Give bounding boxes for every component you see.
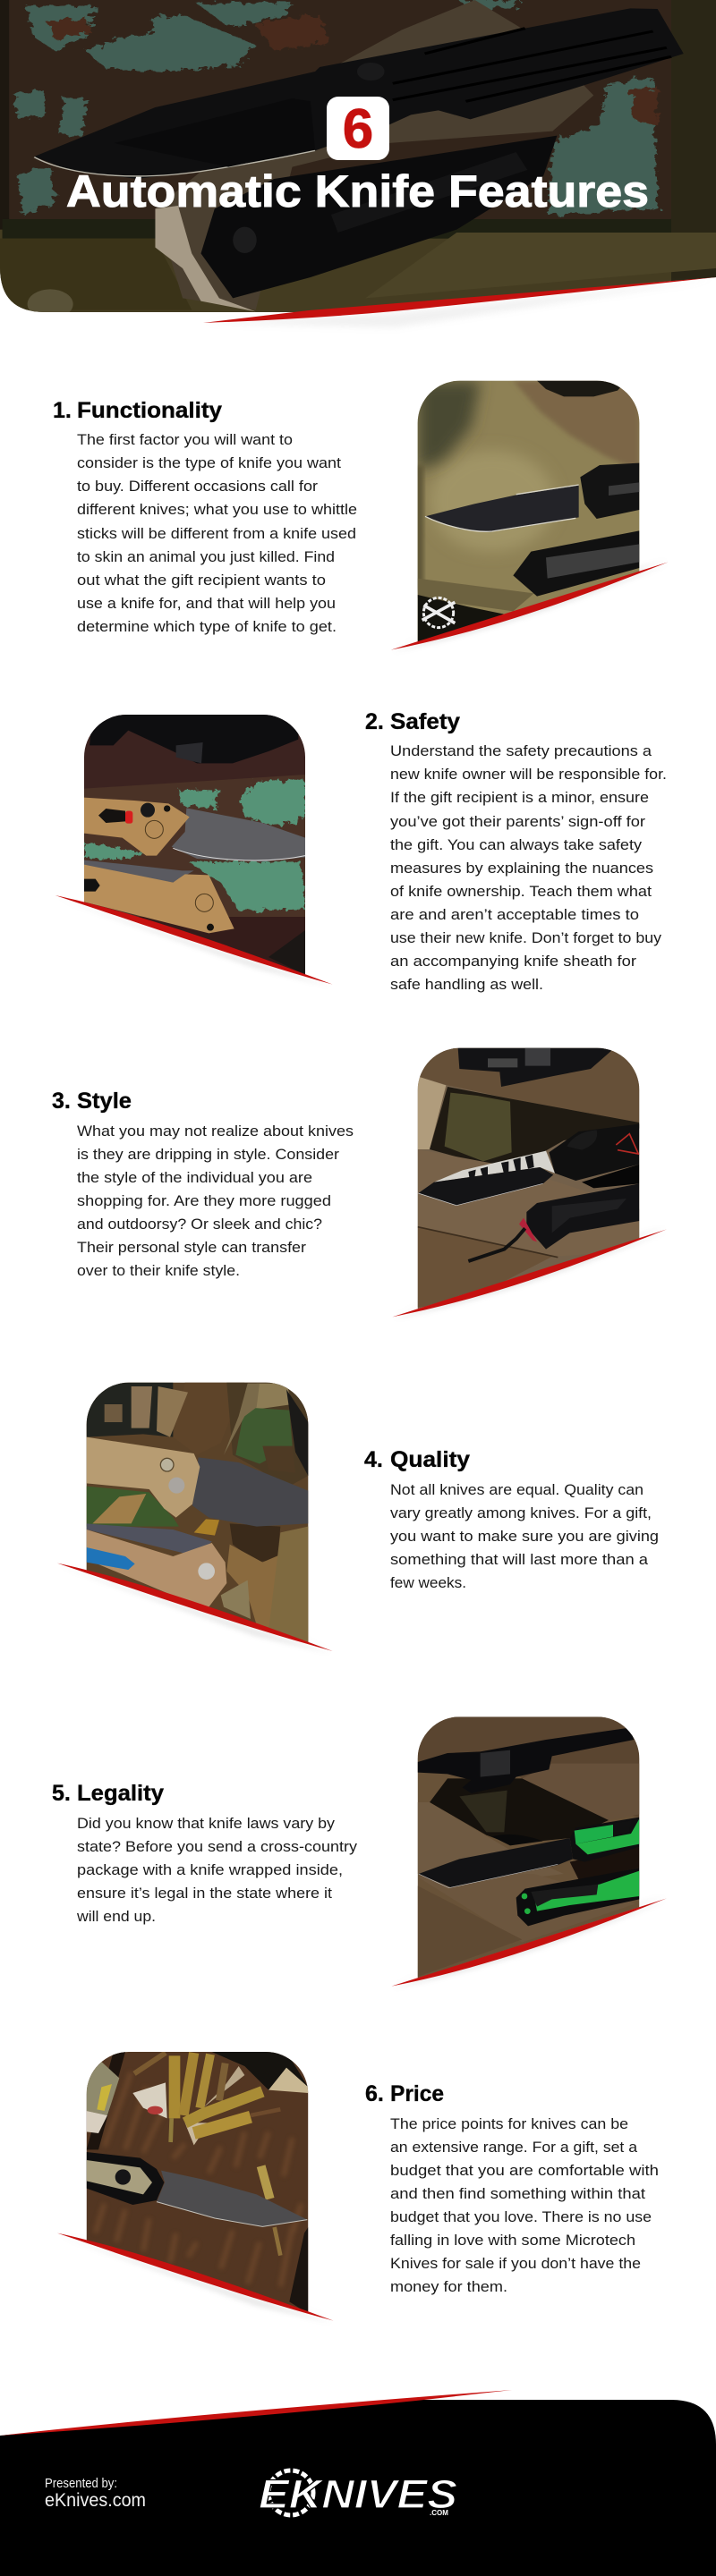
presented by text: Presented by: xyxy=(45,2477,117,2491)
body text: Their personal style can transfer xyxy=(77,1239,306,1256)
body text: ensure it’s legal in the state where it xyxy=(77,1885,332,1902)
heading xyxy=(52,1089,132,1114)
body text: is they are dripping in style. Consider xyxy=(77,1146,339,1163)
body text: over to their knife style. xyxy=(77,1262,240,1279)
image with slash xyxy=(56,1380,333,1654)
panel: 1 Functionality xyxy=(53,378,669,652)
body text: use their new knife. Don’t forget to buy xyxy=(390,929,662,946)
photo: knife and cartridges on dark wood xyxy=(83,2050,311,2318)
number badge: 6 xyxy=(343,98,373,160)
icon: logo stamp xyxy=(422,597,455,628)
title: Automatic Knife Features xyxy=(66,166,649,216)
body text: The price points for knives can be xyxy=(390,2115,628,2132)
body text: to skin an animal you just killed. Find xyxy=(77,548,335,565)
body text: use a knife for, and that will help you xyxy=(77,595,336,612)
panel: 5 Legality xyxy=(52,1715,668,1988)
icon: serrated knife xyxy=(418,1124,639,1206)
body text: and then find something within that xyxy=(390,2185,645,2202)
body text: Understand the safety precautions a xyxy=(390,742,652,759)
image with slash xyxy=(392,1045,668,1319)
panel: 3 Style xyxy=(52,1045,668,1319)
body text: an accompanying knife sheath for xyxy=(390,953,636,970)
header banner xyxy=(0,0,716,327)
body text: the style of the individual you are xyxy=(77,1169,312,1186)
body text: budget that you are comfortable with xyxy=(390,2162,659,2179)
body text: sticks will be different from a knife used xyxy=(77,525,356,542)
heading: 3. xyxy=(52,1089,71,1114)
panel: 4 Quality xyxy=(56,1380,659,1654)
heading: Price xyxy=(390,2081,444,2106)
body text xyxy=(390,1481,659,1591)
body text xyxy=(390,742,667,993)
body text: an extensive range. For a gift, set a xyxy=(390,2139,638,2156)
icon: closed green knife xyxy=(516,1868,639,1926)
body text: If the gift recipient is a minor, ensure xyxy=(390,789,649,806)
red slash xyxy=(391,562,669,650)
icon: lower tan knife xyxy=(84,860,234,933)
body text: budget that you love. There is no use xyxy=(390,2208,652,2225)
image with slash xyxy=(391,378,669,652)
photo: damascus knives on camo xyxy=(83,1380,311,1648)
body text: vary greatly among knives. For a gift, xyxy=(390,1504,652,1521)
red slash xyxy=(57,1563,333,1651)
body text: The first factor you will want to xyxy=(77,431,293,448)
footer black panel xyxy=(0,2400,716,2576)
body text: Not all knives are equal. Quality can xyxy=(390,1481,644,1498)
footer red slash xyxy=(0,2390,512,2436)
body text: What you may not realize about knives xyxy=(77,1123,354,1140)
body text: money for them. xyxy=(390,2278,507,2295)
header photo: two black knives on patina box xyxy=(0,0,716,322)
body text: are and aren’t acceptable times to xyxy=(390,906,639,923)
body text: different knives; what you use to whittle xyxy=(77,501,357,518)
body text xyxy=(77,431,357,635)
photo: green knife and rifle on crate xyxy=(414,1715,642,1983)
body text: out what the gift recipient wants to xyxy=(77,572,326,589)
body text: new knife owner will be responsible for. xyxy=(390,766,667,783)
body text: and outdoorsy? Or sleek and chic? xyxy=(77,1216,322,1233)
body text xyxy=(77,1123,354,1279)
heading: Safety xyxy=(390,709,460,734)
body text xyxy=(390,2115,659,2295)
red slash xyxy=(392,1229,667,1317)
body text: of knife ownership. Teach them what xyxy=(390,883,652,900)
number badge xyxy=(327,97,389,160)
body text xyxy=(76,1815,358,1925)
image with slash xyxy=(56,2050,334,2323)
body text: consider is the type of knife you want xyxy=(77,454,341,471)
presented by text: eKnives.com xyxy=(45,2490,146,2511)
body text: falling in love with some Microtech xyxy=(390,2232,635,2249)
heading: 1. xyxy=(53,398,72,423)
body text: to buy. Different occasions call for xyxy=(77,478,318,495)
logo: eKnives: .COM xyxy=(430,2509,448,2517)
heading: Quality xyxy=(390,1447,470,1472)
logo: eKnives: EKNIVES xyxy=(259,2471,457,2517)
presented by text xyxy=(45,2477,146,2511)
icon: open knife xyxy=(34,8,684,179)
icon: knife with blade xyxy=(425,463,639,532)
photo: tan knives on rusty patina xyxy=(83,713,307,981)
icon: upper tan knife xyxy=(84,798,305,861)
photo: serrated knife on crate xyxy=(414,1045,642,1313)
red slash xyxy=(55,895,333,985)
icon: closed black knife xyxy=(468,1165,639,1261)
heading: 4. xyxy=(364,1447,383,1472)
body text: Did you know that knife laws vary by xyxy=(77,1815,336,1832)
photo: knife on canvas xyxy=(414,378,642,647)
icon: closed handle xyxy=(513,530,639,597)
icon: lower tan knife with blue blade xyxy=(87,1523,226,1607)
body text: shopping for. Are they more rugged xyxy=(77,1192,331,1209)
image with slash xyxy=(55,713,333,987)
heading: 2. xyxy=(365,709,384,734)
body text: safe handling as well. xyxy=(390,976,543,993)
icon: bullet casing xyxy=(194,1519,219,1536)
heading: 5. xyxy=(52,1781,71,1806)
body text: measures by explaining the nuances xyxy=(390,860,653,877)
image with slash xyxy=(391,1715,668,1988)
body text: you want to make sure you are giving xyxy=(390,1528,659,1545)
body text: the gift. You can always take safety xyxy=(390,836,643,853)
header red slash xyxy=(203,277,716,327)
icon: cartridges xyxy=(134,2053,280,2256)
icon: rifle xyxy=(418,1728,634,1793)
heading: Functionality xyxy=(77,398,222,423)
body text: something that will last more than a xyxy=(390,1551,649,1568)
heading: 6. xyxy=(365,2081,384,2106)
icon: wood block xyxy=(155,0,593,310)
icon: closed knife xyxy=(200,136,557,298)
panel: 6 Price xyxy=(56,2050,659,2323)
body text: Knives for sale if you don’t have the xyxy=(390,2255,641,2272)
icon: upper damascus knife xyxy=(87,1437,308,1527)
body text: package with a knife wrapped inside, xyxy=(77,1861,343,1878)
panel: 2 Safety xyxy=(55,709,667,993)
footer xyxy=(0,2390,716,2576)
body text: you’ve got their parents’ sign-off for xyxy=(390,813,645,830)
heading: Style xyxy=(77,1089,132,1114)
red slash xyxy=(391,1898,667,1987)
heading: Legality xyxy=(77,1781,164,1806)
icon: dark blade knife xyxy=(87,2152,307,2226)
red slash xyxy=(57,2233,334,2321)
body text: state? Before you send a cross-country xyxy=(77,1838,358,1855)
body text: few weeks. xyxy=(390,1574,466,1591)
icon: green knife xyxy=(419,1818,639,1888)
heading xyxy=(365,2081,444,2106)
body text: determine which type of knife to get. xyxy=(77,618,337,635)
body text: will end up. xyxy=(76,1908,156,1925)
